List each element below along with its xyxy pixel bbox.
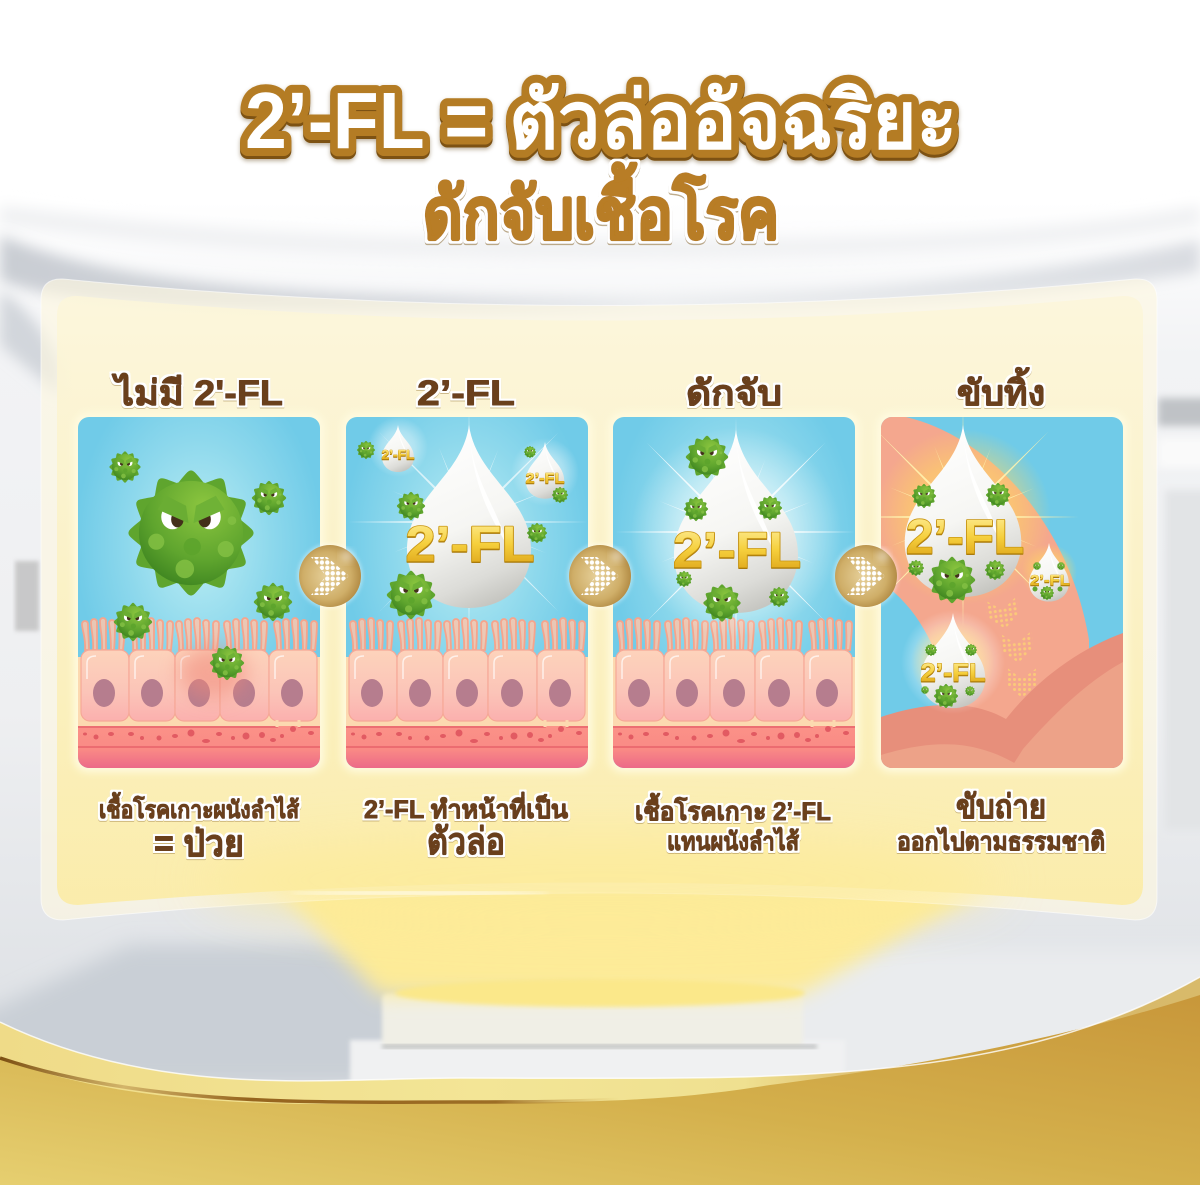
viruses [357, 441, 568, 619]
viruses [109, 451, 292, 680]
large drop: 2’-FL [906, 511, 1024, 564]
intestine tube [881, 417, 1089, 719]
drop [674, 430, 798, 613]
large drop [881, 417, 1076, 622]
panel 1: no 2'-FL [74, 372, 324, 864]
illustration 3: 2’-FL [673, 522, 801, 578]
large drop [407, 425, 531, 608]
tissue mounds [881, 633, 1123, 768]
caption 3 line 2: แทนผนังลำไส้ [667, 826, 800, 856]
panel 4: excretion [848, 367, 1127, 856]
caption 2 line 1: 2’-FL ทำหน้าที่เป็น [364, 792, 568, 824]
heading 4: ขับทิ้ง [957, 367, 1045, 413]
illustration 2: 2’-FL [406, 516, 534, 572]
medium drop: 2’-FL [920, 659, 986, 687]
illustration 4 [848, 407, 1127, 772]
title line 2: ดักจับเชื้อโรค [423, 162, 779, 253]
yellow light glow under panel [270, 880, 1000, 995]
arrow 1 [298, 544, 362, 608]
caption 1 line 2: = ป่วย [154, 823, 244, 864]
chevrons [987, 598, 1036, 696]
small drop: 2’-FL [1030, 572, 1070, 589]
caption 4 line 2: ออกไปตามธรรมชาติ [897, 826, 1105, 856]
illustration 3 [609, 413, 859, 772]
title line 1: 2’-FL = ตัวล่ออัจฉริยะ [245, 76, 957, 165]
small drop [1021, 543, 1077, 602]
pedestal top lit [395, 979, 805, 1007]
gold wave footer [0, 977, 1200, 1185]
panel 2: 2'-FL [342, 374, 592, 862]
heading 2: 2’-FL [417, 374, 515, 413]
arrow 2 [568, 544, 632, 608]
illustration 2 [342, 407, 592, 772]
viruses [908, 483, 1065, 708]
caption 1 line 1: เชื้อโรคเกาะผนังลำไส้ [99, 791, 299, 824]
caption 4 line 1: ขับถ่าย [956, 788, 1046, 825]
caption 2 line 2: ตัวล่อ [427, 821, 505, 862]
illustration 1 [74, 413, 324, 772]
caption 3 line 1: เชื้อโรคเกาะ 2’-FL [635, 792, 831, 826]
heading 1: ไม่มี 2'-FL [111, 372, 283, 413]
panel: translucent frame [41, 279, 1157, 925]
arrow 3 [834, 544, 898, 608]
panel 3: trapping [609, 374, 859, 856]
small drops [382, 425, 414, 472]
medium drop [904, 613, 1002, 711]
viruses [676, 436, 789, 622]
illustration 2: 2’-FL [526, 470, 564, 487]
illustration 2: 2’-FL [382, 447, 415, 462]
heading 3: ดักจับ [686, 374, 782, 413]
